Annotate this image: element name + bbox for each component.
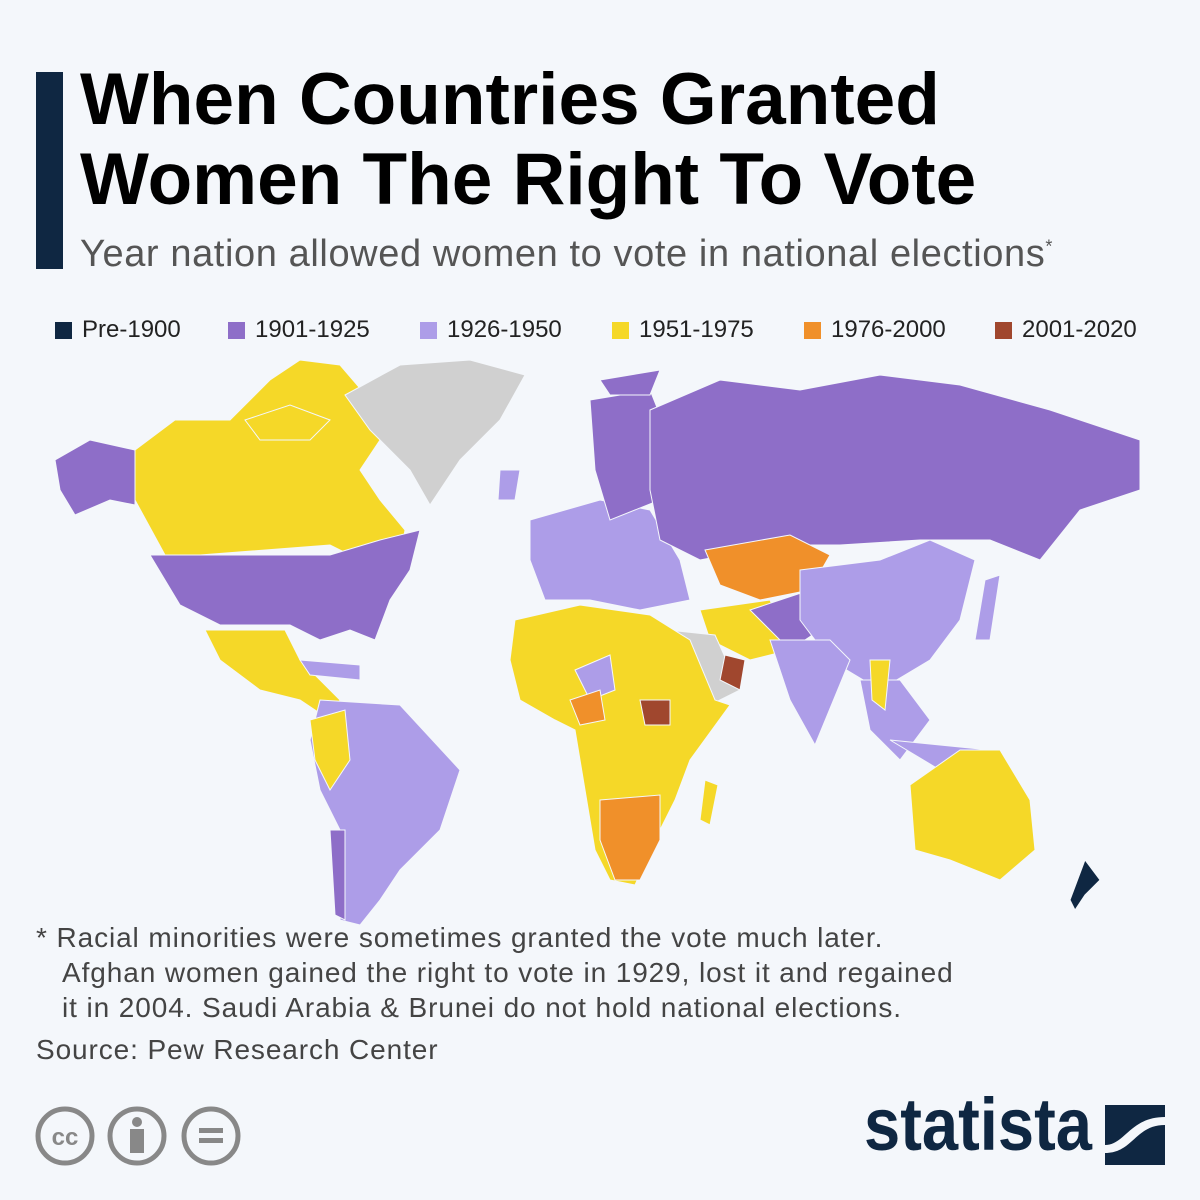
- footnote: [36, 922, 954, 1023]
- title: Women The Right To Vote: [80, 139, 976, 220]
- New Zealand: [1070, 860, 1100, 910]
- legend: 1901-1925: [255, 316, 370, 343]
- Russia: [650, 375, 1140, 560]
- Africa: [510, 605, 730, 885]
- South America: [310, 700, 460, 925]
- Alaska: [55, 440, 135, 515]
- statista logo: statista: [864, 1083, 1092, 1166]
- legend: 2001-2020: [1022, 316, 1137, 343]
- legend: 1926-1950: [447, 316, 562, 343]
- India: [770, 640, 850, 745]
- Canada: [135, 360, 405, 560]
- Middle East / Central Asia: [700, 600, 790, 660]
- footnote: Afghan women gained the right to vote in 1929, lost it and regained: [62, 957, 954, 988]
- source: Source: Pew Research Center: [36, 1034, 438, 1065]
- Caribbean: [300, 660, 360, 680]
- subtitle: Year nation allowed women to vote in national elections*: [80, 233, 1053, 275]
- legend: 1976-2000: [831, 316, 946, 343]
- legend: 1951-1975: [639, 316, 754, 343]
- icons: creative commons: cc: [52, 1124, 78, 1151]
- Kazakhstan: [705, 535, 830, 600]
- SE Asia: [860, 680, 930, 760]
- Australia: [910, 750, 1035, 880]
- legend: [55, 316, 1137, 343]
- footnote: it in 2004. Saudi Arabia & Brunei do not hold national elections.: [62, 992, 902, 1023]
- title accent bar: [36, 72, 63, 269]
- Europe: [530, 500, 690, 610]
- Mexico & Central America: [205, 630, 340, 720]
- China: [800, 540, 975, 690]
- legend: Pre-1900: [82, 316, 181, 343]
- Arabia: [668, 630, 740, 705]
- logo mark: [1105, 1105, 1165, 1165]
- icons: creative commons: [36, 1106, 240, 1166]
- Japan: [975, 575, 1000, 640]
- footnote: * Racial minorities were sometimes granted the vote much later.: [36, 922, 883, 953]
- title: [80, 59, 976, 220]
- Madagascar: [700, 780, 718, 825]
- USA: [150, 530, 420, 640]
- Greenland: [345, 360, 525, 505]
- title: When Countries Granted: [80, 59, 940, 140]
